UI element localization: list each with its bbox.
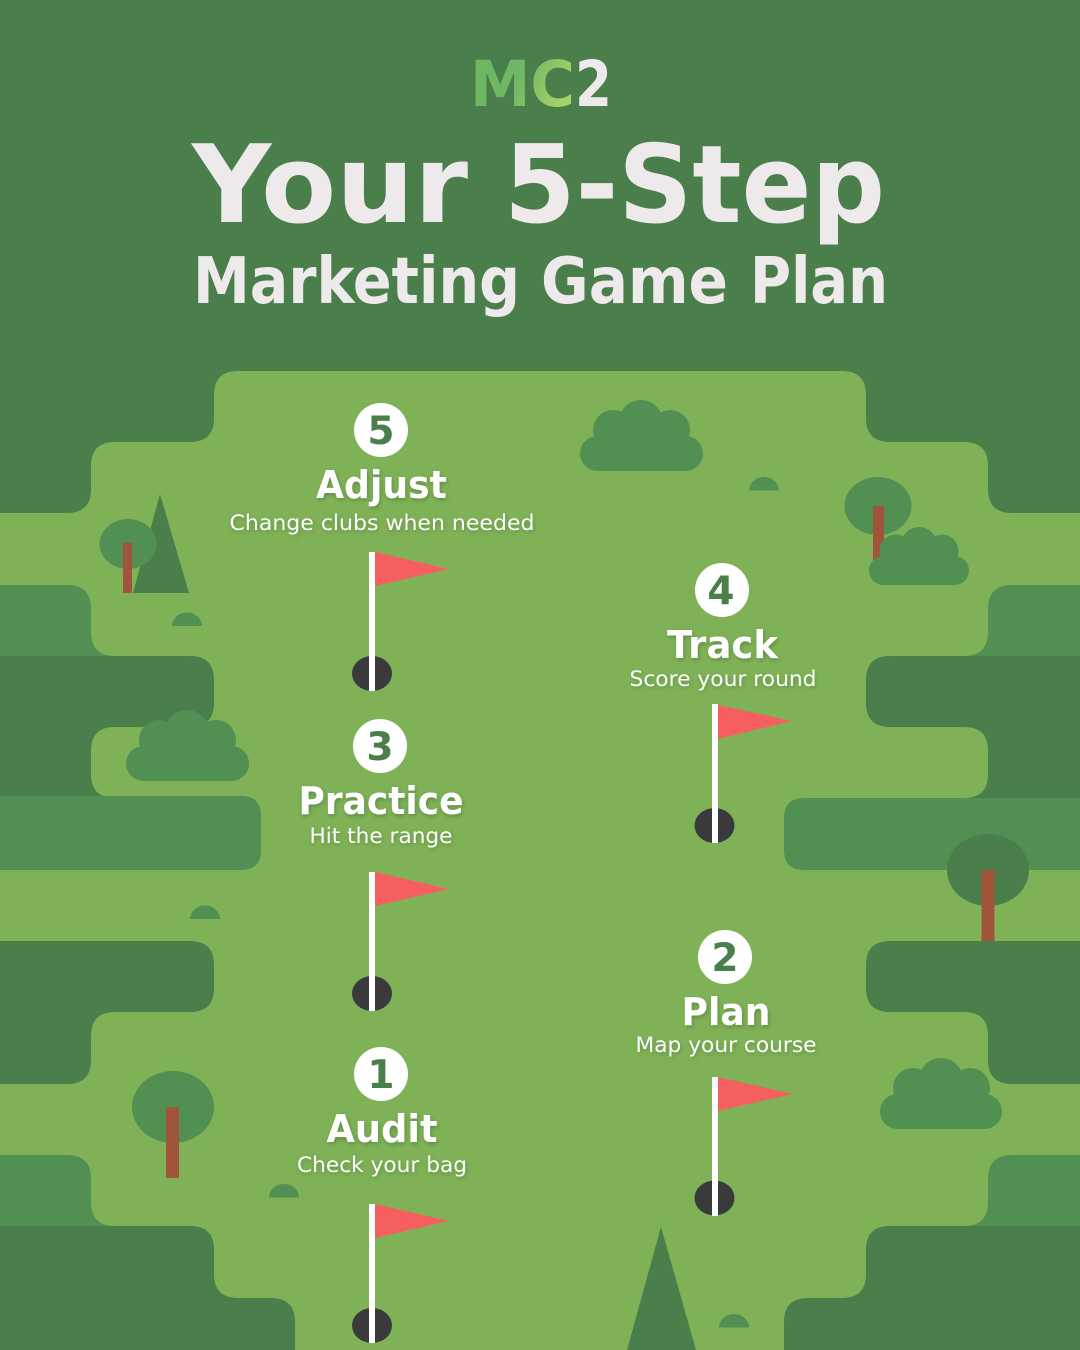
icon: mound 4	[269, 1184, 299, 1198]
subtitle	[193, 244, 888, 319]
subtitle: Game	[541, 244, 728, 319]
heading practice: Practice	[298, 779, 464, 823]
step 4: track	[630, 563, 816, 843]
icon: tree lower left	[132, 1071, 214, 1178]
number badge 3: 3	[366, 725, 394, 770]
description: Map your course	[636, 1033, 816, 1057]
description: Change clubs when needed	[230, 511, 534, 535]
heading plan: Plan	[682, 990, 770, 1034]
title	[190, 123, 885, 248]
subtitle: Marketing	[193, 244, 520, 319]
icon: hole and flag	[694, 704, 792, 843]
step 1: audit	[297, 1047, 467, 1343]
title: 5-Step	[504, 123, 885, 248]
icon: hole and flag	[694, 1077, 793, 1216]
icon: mound 5	[719, 1314, 749, 1328]
step 2: plan	[636, 930, 816, 1216]
heading track: Track	[667, 623, 779, 667]
icon: hole and flag	[352, 1204, 449, 1343]
icon: tree and pine left	[100, 494, 189, 593]
number badge 4: 4	[707, 569, 735, 614]
icon: tree and bush top right	[844, 477, 969, 585]
number badge 5	[354, 403, 408, 457]
logo: MC	[470, 48, 575, 121]
icon: pine bottom	[627, 1227, 696, 1350]
step 5: adjust	[230, 403, 534, 691]
icon: mound 2	[749, 477, 779, 490]
title: Your	[190, 123, 468, 248]
number badge 3	[353, 719, 407, 773]
number badge 2	[698, 930, 752, 984]
number badge 1	[354, 1047, 408, 1101]
icon: bush top centre	[580, 400, 703, 471]
icon: hole and flag	[352, 552, 449, 691]
number badge 1: 1	[367, 1053, 395, 1098]
number badge 5: 5	[367, 409, 395, 454]
panel: fairway	[0, 360, 1080, 1350]
icon: tree right	[947, 834, 1029, 941]
step 3: practice	[298, 719, 464, 1011]
number badge 4	[695, 563, 749, 617]
icon: mound 1	[172, 612, 202, 626]
description: Hit the range	[310, 824, 452, 848]
subtitle: Plan	[750, 244, 888, 319]
heading adjust: Adjust	[316, 463, 447, 507]
icon: mound 3	[190, 906, 220, 919]
icon: hole and flag	[352, 872, 449, 1011]
number badge 2: 2	[711, 936, 739, 981]
icon: bush lower right	[880, 1058, 1002, 1129]
description: Check your bag	[297, 1153, 467, 1177]
logo: 2	[575, 48, 612, 121]
heading audit: Audit	[326, 1107, 438, 1151]
description: Score your round	[630, 667, 816, 691]
icon: bush left	[126, 710, 249, 781]
